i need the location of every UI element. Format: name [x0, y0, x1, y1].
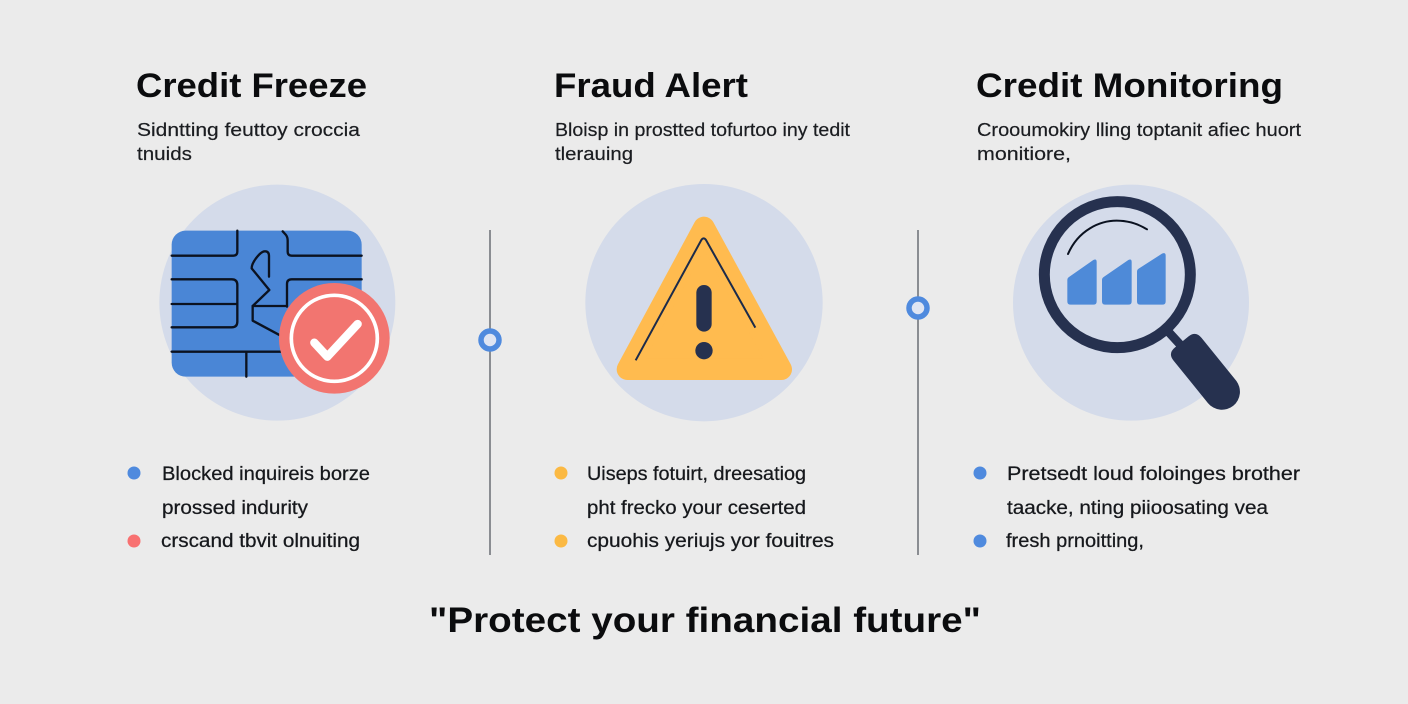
panel: fraud alert: [554, 67, 850, 552]
bullet list: credit monitoring: taacke, nting piioosating vea: [1007, 498, 1268, 519]
icon: warning triangle: [585, 184, 823, 421]
divider with node: right: [909, 230, 927, 555]
bullet list: credit freeze: [128, 464, 370, 552]
text block: credit freeze description: Sidntting feuttoy croccia: [137, 119, 361, 140]
heading: fraud alert: Fraud Alert: [554, 67, 748, 105]
bullet list: credit freeze: Blocked inquireis borze: [162, 464, 370, 485]
heading: credit monitoring: Credit Monitoring: [976, 67, 1283, 105]
bar chart: three rising bars: [1067, 253, 1166, 305]
divider with node: left: [481, 230, 499, 555]
bullet list: fraud alert: [554, 464, 834, 552]
bullet list: credit monitoring: Pretsedt loud foloinges brother: [1007, 464, 1301, 485]
text block: fraud alert description: Bloisp in prostted tofurtoo iny tedit: [555, 119, 850, 140]
icon: check badge: [279, 283, 390, 394]
bullet list: credit freeze: prossed indurity: [162, 498, 309, 519]
text block: fraud alert description: [555, 119, 850, 164]
text block: credit monitoring description: monitiore,: [977, 143, 1071, 164]
bullet list: credit freeze: crscand tbvit olnuiting: [161, 531, 360, 552]
text block: credit freeze description: tnuids: [137, 143, 192, 164]
bullet list: fraud alert: Uiseps fotuirt, dreesatiog: [587, 464, 806, 485]
bullet list: fraud alert: pht frecko your ceserted: [587, 498, 806, 519]
panel: credit freeze: [128, 67, 395, 552]
bullet list: credit monitoring: fresh prnoitting,: [1006, 531, 1144, 552]
icon: credit card chip with check badge: [159, 185, 395, 421]
text block: credit freeze description: [137, 119, 361, 164]
text block: credit monitoring description: [977, 119, 1301, 164]
text block: credit monitoring description: Crooumokiry lling toptanit afiec huort: [977, 119, 1301, 140]
icon: magnifying glass over bar chart: [1013, 185, 1249, 421]
panel: credit monitoring: [974, 67, 1301, 552]
bullet list: fraud alert: cpuohis yeriujs yor fouitres: [587, 531, 834, 552]
closing quote: "Protect your financial future": [429, 600, 981, 640]
heading: credit freeze: Credit Freeze: [136, 67, 367, 105]
bullet list: credit monitoring: [974, 464, 1301, 552]
text block: fraud alert description: tlerauing: [555, 143, 633, 164]
